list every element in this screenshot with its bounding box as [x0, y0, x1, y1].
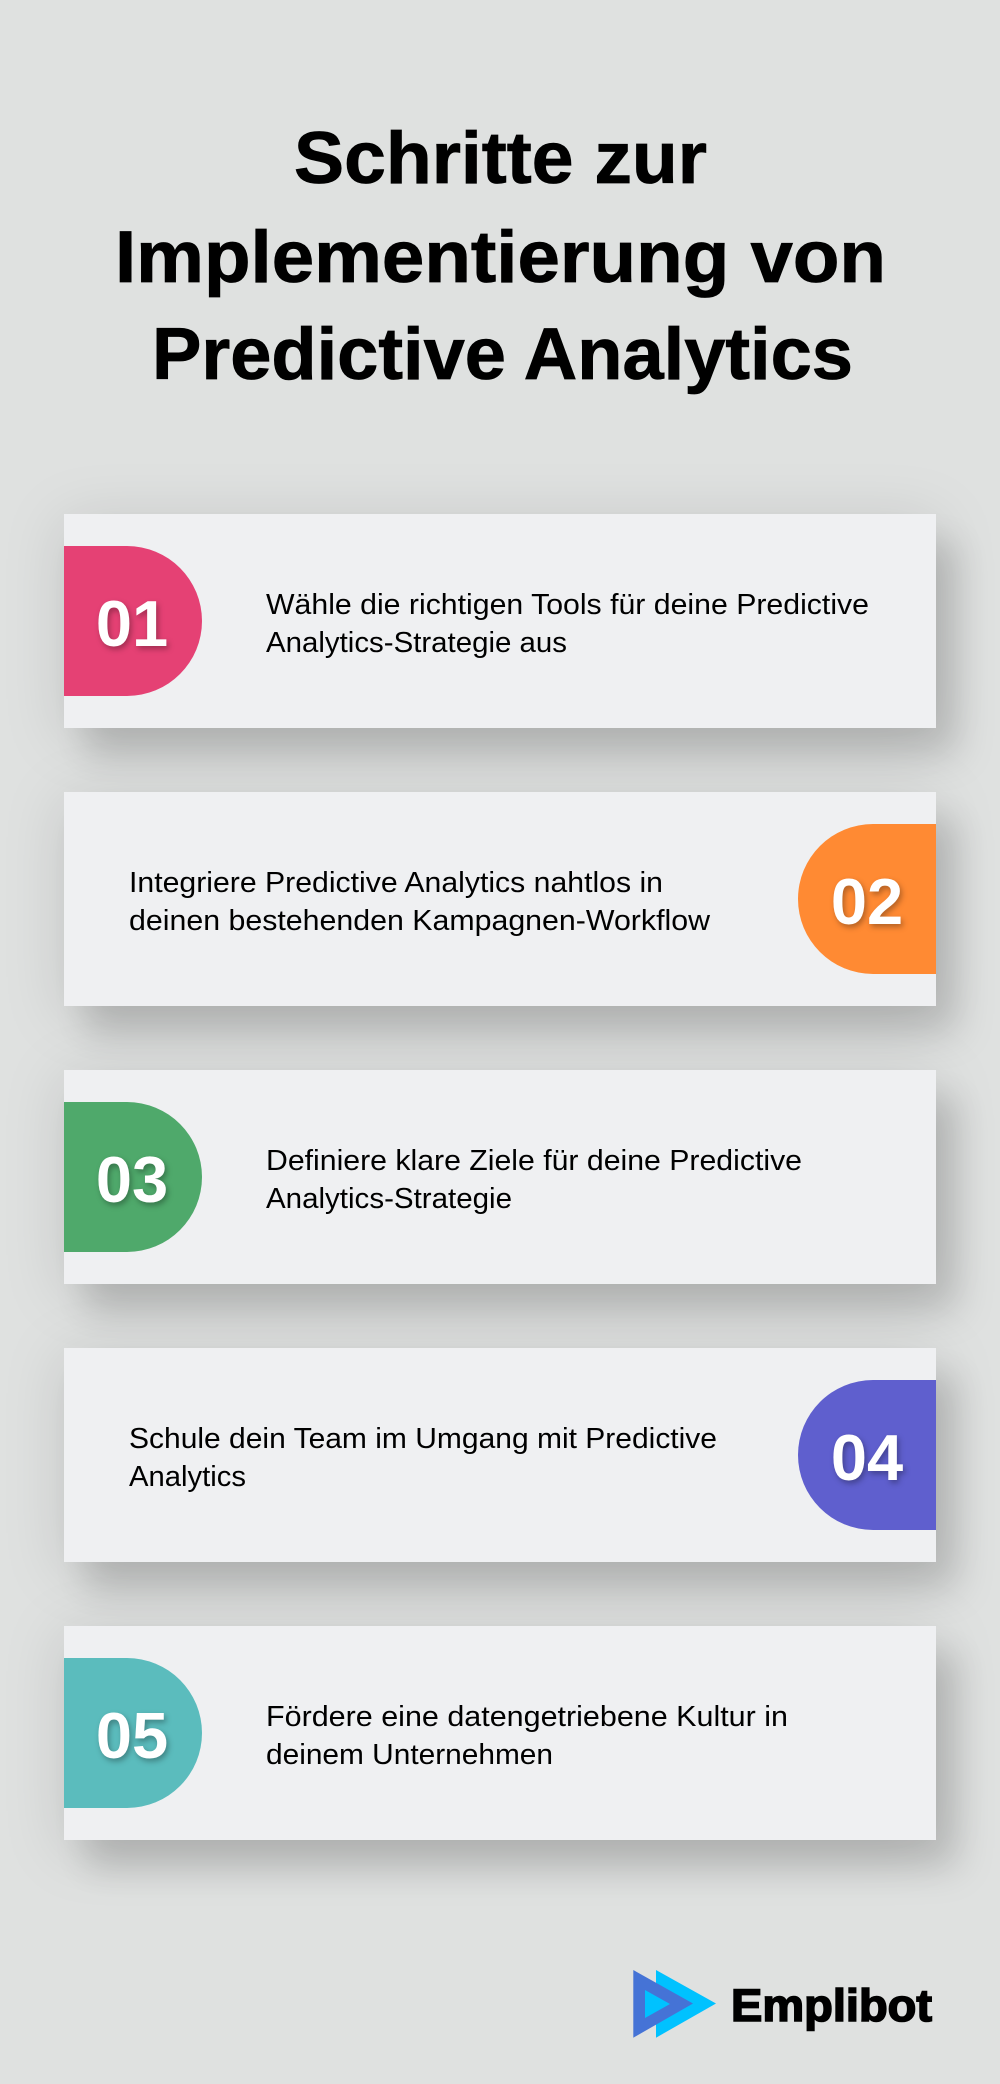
badge 04: 04	[831, 1421, 903, 1494]
text step 05: deinem Unternehmen	[266, 1739, 553, 1771]
text step 02	[129, 867, 711, 937]
text step 03: Definiere klare Ziele für deine Predictive	[266, 1145, 802, 1177]
panel: step 04	[64, 1348, 936, 1562]
badge 01: 01	[96, 587, 168, 660]
text step 02: deinen bestehenden Kampagnen-Workflow	[129, 905, 711, 937]
title: Schritte zur	[294, 118, 707, 199]
text step 04: Analytics	[129, 1461, 246, 1493]
badge 02	[798, 824, 936, 974]
badge 03	[64, 1102, 202, 1252]
panel: step 01	[64, 514, 936, 728]
panel: step 05	[64, 1626, 936, 1840]
title: Implementierung von	[115, 217, 886, 298]
title: Predictive Analytics	[152, 314, 853, 395]
badge 01	[64, 546, 202, 696]
text step 05	[266, 1701, 788, 1771]
icon: play triangles	[633, 1970, 716, 2038]
badge 05: 05	[96, 1699, 168, 1772]
panel: step 03	[64, 1070, 936, 1284]
title	[115, 118, 886, 395]
text step 03	[266, 1145, 802, 1215]
badge 05	[64, 1658, 202, 1808]
text step 04: Schule dein Team im Umgang mit Predictive	[129, 1423, 717, 1455]
text step 01: Wähle die richtigen Tools für deine Predictive	[266, 589, 869, 621]
badge 02: 02	[831, 865, 903, 938]
logo: Emplibot	[633, 1970, 932, 2038]
text step 01: Analytics-Strategie aus	[266, 627, 567, 659]
badge 04	[798, 1380, 936, 1530]
wordmark: Emplibot	[731, 1980, 932, 2031]
text step 05: Fördere eine datengetriebene Kultur in	[266, 1701, 788, 1733]
panel: step 02	[64, 792, 936, 1006]
badge 03: 03	[96, 1143, 168, 1216]
text step 04	[129, 1423, 717, 1493]
text step 03: Analytics-Strategie	[266, 1183, 512, 1215]
text step 01	[266, 589, 869, 659]
text step 02: Integriere Predictive Analytics nahtlos in	[129, 867, 663, 899]
